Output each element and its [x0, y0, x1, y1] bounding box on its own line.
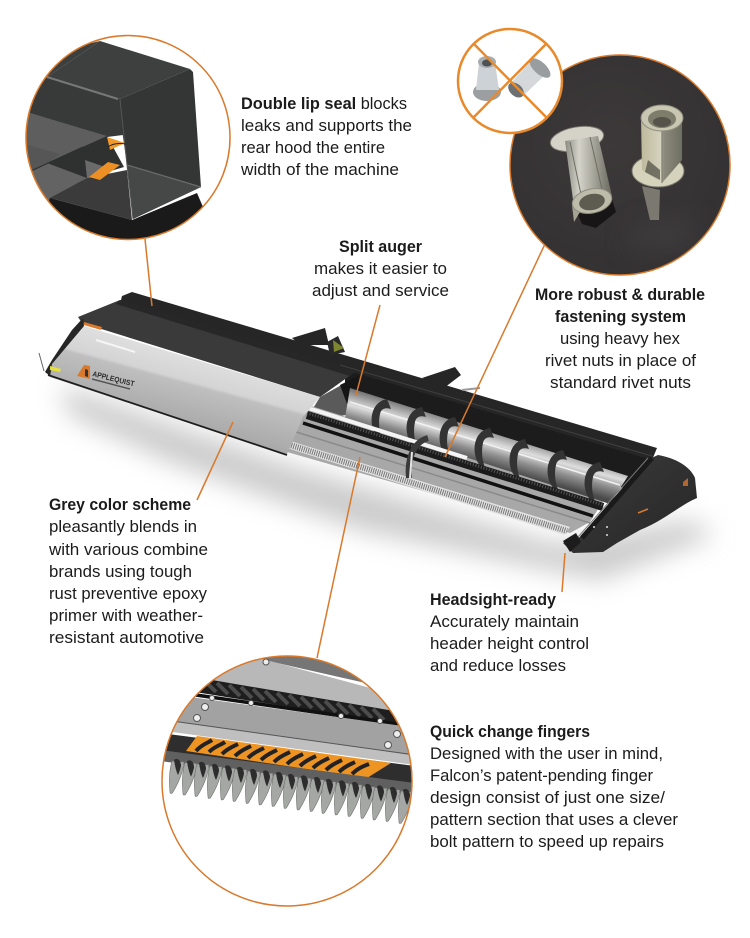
- detail circle: heavy hex rivet nuts: [510, 55, 730, 275]
- heading: fastening system: standard rivet nuts: [550, 374, 691, 392]
- left hex nut: [548, 122, 616, 228]
- dark hood: [78, 300, 355, 397]
- auger tube: [345, 388, 628, 504]
- heading: grey color scheme: primer with weather-: [49, 607, 203, 625]
- heading: headsight-ready: [430, 591, 589, 675]
- heading: grey color scheme: pleasantly blends in: [49, 518, 197, 536]
- heading: grey color scheme: rust preventive epoxy: [49, 585, 208, 603]
- brackets and hydraulics: [292, 328, 329, 345]
- hatched knife strip: [287, 440, 570, 535]
- heading: fastening system: fastening system: [555, 308, 686, 326]
- heading: split auger: adjust and service: [312, 282, 449, 300]
- hood upper face: [47, 41, 190, 99]
- heading: double lip seal: [240, 95, 412, 179]
- heading: headsight-ready: and reduce losses: [430, 657, 566, 675]
- heading: split auger: Split auger: [339, 238, 423, 256]
- upper finger row: [195, 680, 400, 724]
- heading: quick change fingers: pattern section that uses a clever: [430, 811, 679, 829]
- floor: [50, 170, 132, 220]
- yellow reflector: [50, 366, 61, 372]
- cutter fingers: [169, 759, 413, 824]
- right hex nut: [632, 105, 684, 220]
- leader lines: [145, 239, 565, 658]
- heading: grey color scheme: with various combine: [48, 541, 208, 559]
- ground shadow: [60, 385, 715, 580]
- heading: split auger: [312, 238, 449, 300]
- box right face: [120, 69, 201, 219]
- detail circle: double lip seal: [20, 36, 230, 250]
- machine: combine header: [39, 292, 715, 580]
- lower light band: [173, 722, 410, 764]
- orange seal: [107, 137, 125, 150]
- finger support dark: [166, 734, 412, 782]
- window: [47, 136, 124, 178]
- middle plate: [178, 698, 408, 754]
- heading: double lip seal: leaks and supports the: [241, 117, 412, 135]
- heading: double lip seal: width of the machine: [240, 161, 399, 179]
- heading: double lip seal: rear hood the entire: [241, 139, 385, 157]
- grey hood: [50, 326, 320, 454]
- mechanism at auger split: [306, 383, 355, 420]
- bottom black: [49, 193, 202, 239]
- heading: headsight-ready: Accurately maintain: [430, 613, 579, 631]
- upper plate: [209, 659, 398, 726]
- hood logo: APPLEQUIST: [92, 369, 136, 388]
- lower grey triangle: [84, 178, 87, 180]
- flights: [372, 399, 604, 506]
- end cap logo: [683, 478, 688, 486]
- inset circle: standard rivet nuts crossed out: [458, 29, 562, 133]
- interior grey: [26, 113, 106, 200]
- heading: quick change fingers: bolt pattern to speed up repairs: [430, 833, 664, 851]
- heading: quick change fingers: Designed with the user in mind,: [430, 745, 663, 763]
- heading: grey color scheme: [48, 496, 208, 647]
- bolts: [194, 659, 400, 748]
- heading: double lip seal: Double lip seal blocks: [241, 95, 407, 113]
- pan: [287, 405, 605, 533]
- end cap: [563, 455, 697, 553]
- heading: split auger: makes it easier to: [314, 260, 447, 278]
- heading: fastening system: [535, 286, 705, 392]
- heading: grey color scheme: brands using tough: [49, 563, 192, 581]
- heading: fastening system: rivet nuts in place of: [545, 352, 696, 370]
- detail circle: quick change fingers: [160, 650, 415, 906]
- heading: grey color scheme: Grey color scheme: [49, 496, 191, 514]
- orange finger section: [186, 736, 391, 778]
- heading: quick change fingers: Falcon’s patent-pending finger: [430, 767, 654, 785]
- finger rows: [308, 408, 467, 458]
- orange strip: [84, 322, 102, 330]
- top beam: [120, 292, 657, 460]
- heading: fastening system: More robust & durable: [535, 286, 705, 304]
- back panel behind the auger: [345, 368, 652, 490]
- heading: quick change fingers: design consist of just one size/: [430, 789, 665, 807]
- standard rivet nut lying: [505, 55, 554, 100]
- heading: quick change fingers: Quick change fingers: [430, 723, 590, 741]
- standard rivet nut upright: [473, 56, 501, 101]
- lower bar: [160, 750, 415, 795]
- heading: quick change fingers: [430, 723, 679, 851]
- heading: headsight-ready: Headsight-ready: [430, 591, 557, 609]
- hood logo: [77, 365, 136, 389]
- cross: [473, 43, 547, 118]
- center support: [409, 438, 428, 478]
- top dark strip: [262, 656, 362, 682]
- heading: fastening system: using heavy hex: [560, 330, 681, 348]
- side frame left: [45, 318, 84, 376]
- heading: headsight-ready: header height control: [430, 635, 589, 653]
- heading: grey color scheme: resistant automotive: [49, 629, 204, 647]
